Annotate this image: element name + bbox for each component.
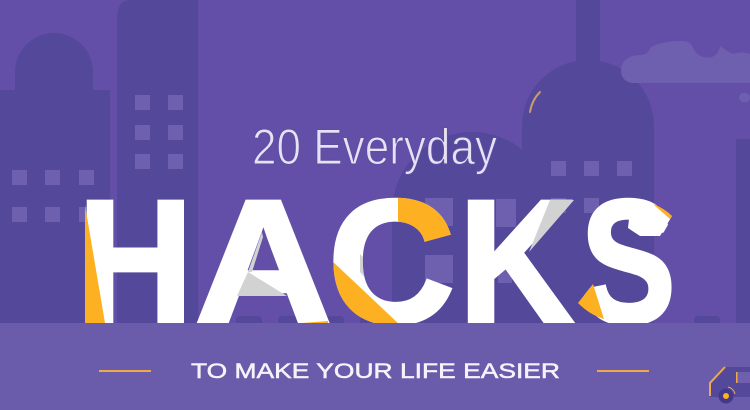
skyline: right domed tower with chimney	[522, 0, 654, 323]
letter S: S	[581, 164, 675, 359]
street bumps	[236, 316, 720, 326]
skyline: tall tower	[117, 0, 198, 323]
S terminal fill	[628, 203, 672, 236]
letter C: C	[328, 165, 455, 360]
left orange rule	[99, 370, 151, 372]
letter K: K	[459, 165, 574, 360]
letter C	[333, 198, 452, 323]
K grey facet	[529, 200, 574, 252]
right orange rule	[597, 370, 649, 372]
tagline: TO MAKE YOUR LIFE EASIER	[191, 360, 560, 383]
S terminal trim	[661, 216, 680, 237]
S orange facets	[578, 284, 604, 319]
letter A: A	[195, 164, 332, 359]
skyline: far right building	[736, 139, 750, 323]
H orange facet	[85, 205, 105, 323]
C orange and grey facets	[333, 198, 451, 323]
icon: truck	[710, 367, 750, 404]
A grey facets	[237, 232, 328, 323]
subtitle: 20 Everyday	[252, 119, 497, 175]
bottom band	[0, 323, 750, 410]
S terminal cut-out	[574, 280, 593, 303]
heading: HACKS	[85, 198, 672, 323]
letter H: H	[78, 165, 193, 360]
skyline: left domed building	[0, 33, 110, 323]
icon: orange dome highlight	[530, 92, 540, 112]
skyline: middle round building	[392, 132, 552, 323]
icon: cloud	[621, 41, 750, 102]
